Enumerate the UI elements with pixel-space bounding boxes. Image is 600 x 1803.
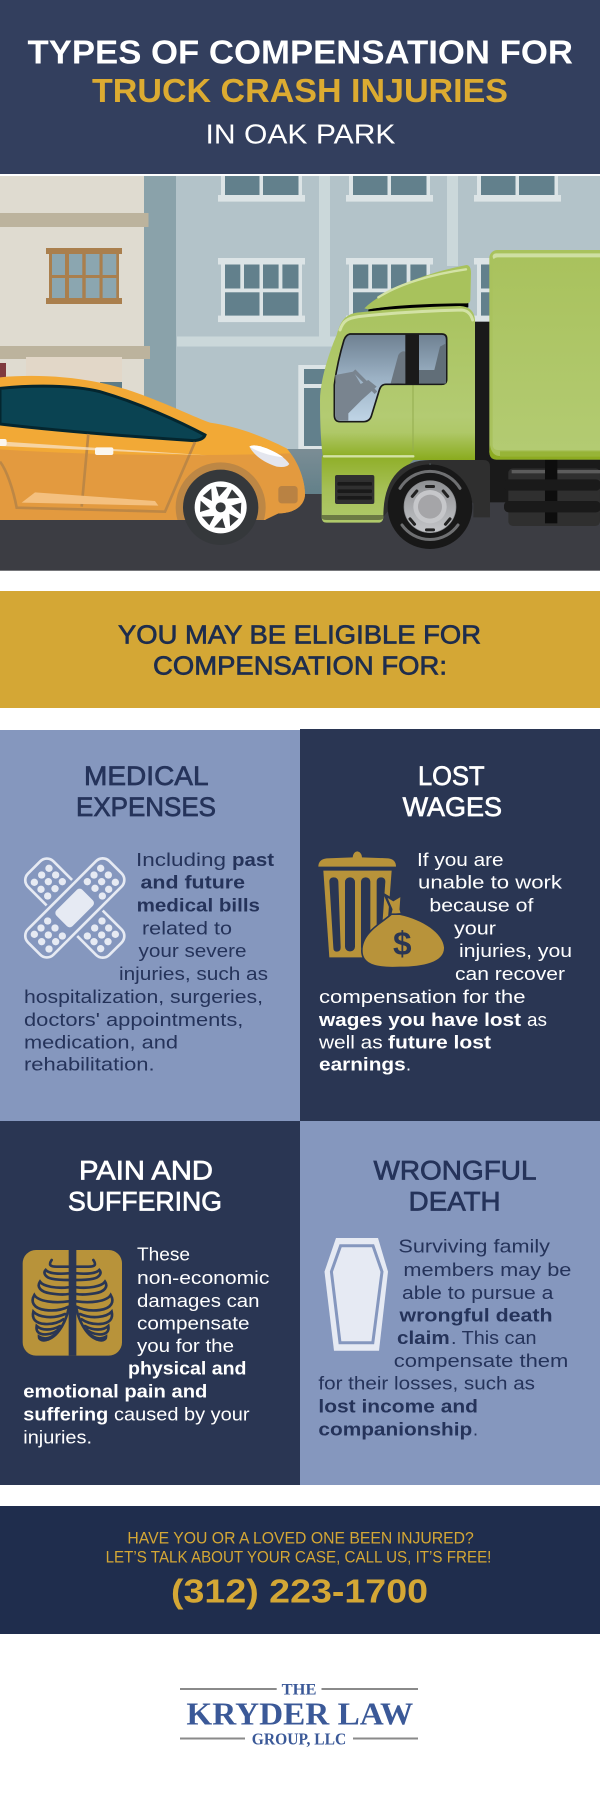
body text: pain and suffering: emotional pain and: [23, 1382, 207, 1402]
heading: medical expenses: MEDICAL: [84, 761, 209, 791]
front wheel: [388, 464, 472, 549]
phone number: (312) 223-1700: [171, 1573, 428, 1610]
body text: medical expenses: past: [232, 850, 274, 870]
body text: lost wages: .: [406, 1055, 411, 1075]
panel: medical expenses: [0, 730, 300, 1121]
heading: lost wages: WAGES: [403, 792, 502, 822]
body text: medical expenses: Including: [136, 850, 226, 870]
heading: medical expenses: [76, 761, 216, 822]
body text: lost wages: injuries, you: [459, 941, 572, 961]
heading: medical expenses: EXPENSES: [76, 792, 216, 822]
heading: wrongful death: DEATH: [409, 1186, 501, 1216]
eligibility banner: [0, 591, 600, 708]
body text: medical expenses: your severe: [138, 941, 246, 961]
body text: wrongful death: claim: [397, 1328, 450, 1348]
title line: truck crash injuries: TRUCK CRASH INJURIES: [92, 72, 508, 109]
heading: pain and suffering: [68, 1156, 222, 1216]
body text: wrongful death: able to pursue a: [402, 1283, 555, 1303]
call to action banner: [0, 1506, 600, 1634]
body text: pain and suffering: compensate: [137, 1314, 250, 1334]
body text: medical expenses: rehabilitation.: [24, 1055, 155, 1075]
body text: lost wages: earnings: [319, 1055, 406, 1075]
cargo box: [489, 250, 600, 460]
logo: the kryder law group: THE: [282, 1682, 316, 1699]
body text: lost wages: future lost: [388, 1033, 491, 1053]
body text: lost wages: wages you have lost: [318, 1010, 521, 1030]
background buildings: [0, 176, 600, 496]
logo: the kryder law group: [180, 1682, 418, 1749]
logo: the kryder law group: KRYDER LAW: [186, 1696, 413, 1732]
body text: pain and suffering: damages can: [137, 1291, 260, 1311]
body text: medical expenses: hospitalization, surgeries,: [24, 987, 263, 1007]
logo: the kryder law group: GROUP, LLC: [252, 1730, 346, 1749]
body text: lost wages: well as: [318, 1033, 383, 1053]
cta question line: HAVE YOU OR A LOVED ONE BEEN INJURED?: [127, 1529, 474, 1547]
road: [0, 494, 600, 571]
heading: wrongful death: WRONGFUL: [374, 1156, 536, 1186]
mudguard: [383, 460, 490, 517]
cab: [320, 306, 475, 523]
body text: lost wages: your: [454, 919, 496, 939]
body text: lost wages: can recover: [455, 964, 565, 984]
body text: pain and suffering: injuries.: [23, 1427, 92, 1447]
banner line 1: YOU MAY BE ELIGIBLE FOR: [118, 620, 481, 650]
icon: trash can and money bag: [318, 851, 444, 967]
body text: lost wages: If you are: [417, 850, 504, 870]
body text: medical expenses: [24, 850, 274, 1075]
illustration: street scene with car and truck: [0, 176, 600, 571]
panel: lost wages: [300, 729, 600, 1121]
banner line 2: COMPENSATION FOR:: [153, 651, 447, 681]
body text: lost wages: [318, 850, 572, 1075]
body text: pain and suffering: suffering: [23, 1405, 108, 1425]
body text: medical expenses: related to: [142, 919, 232, 939]
panel: pain and suffering: [0, 1121, 300, 1485]
subtitle: in oak park: IN OAK PARK: [206, 118, 396, 150]
body text: wrongful death: companionship: [318, 1419, 472, 1439]
heading: pain and suffering: SUFFERING: [68, 1186, 222, 1216]
body text: wrongful death: wrongful death: [398, 1306, 553, 1326]
heading: wrongful death: [374, 1156, 536, 1216]
body text: wrongful death: [318, 1237, 571, 1439]
body text: medical expenses: injuries, such as: [119, 964, 268, 984]
body text: pain and suffering: caused by your: [114, 1405, 250, 1425]
body text: pain and suffering: non-economic: [137, 1268, 269, 1288]
icon: coffin: [324, 1238, 388, 1351]
panel: wrongful death: [300, 1121, 600, 1485]
body text: lost wages: compensation for the: [319, 987, 526, 1007]
body text: medical expenses: and future: [140, 872, 245, 892]
car: [0, 376, 310, 552]
body text: wrongful death: Surviving family: [398, 1237, 550, 1257]
body text: lost wages: unable to work: [418, 872, 563, 892]
body text: wrongful death: . This can: [451, 1328, 536, 1348]
body text: pain and suffering: [23, 1245, 269, 1447]
body text: pain and suffering: you for the: [137, 1336, 234, 1356]
body text: medical expenses: medication, and: [24, 1033, 178, 1053]
body text: wrongful death: compensate them: [394, 1351, 568, 1371]
body text: medical expenses: doctors' appointments,: [24, 1010, 243, 1030]
truck: [320, 250, 600, 549]
icon: rib cage: [23, 1250, 122, 1356]
icon: trash can and money bag: $: [393, 926, 412, 963]
body text: wrongful death: .: [473, 1419, 478, 1439]
body text: lost wages: because of: [429, 896, 535, 916]
title line: types of compensation for: TYPES OF COMPENSATION FOR: [28, 34, 573, 70]
air deflector: [364, 265, 471, 311]
heading: lost wages: [403, 761, 502, 822]
icon: crossed bandages: [21, 854, 128, 962]
body text: wrongful death: members may be: [403, 1260, 571, 1280]
header banner: [0, 0, 600, 174]
body text: pain and suffering: physical and: [128, 1359, 246, 1379]
cta invitation line: LET’S TALK ABOUT YOUR CASE, CALL US, IT’S FREE!: [106, 1548, 491, 1566]
heading: lost wages: LOST: [418, 761, 484, 791]
body text: pain and suffering: These: [137, 1245, 190, 1265]
heading: pain and suffering: PAIN AND: [79, 1156, 213, 1186]
body text: medical expenses: medical bills: [137, 896, 260, 916]
car wheel: [183, 470, 258, 545]
body text: wrongful death: lost income and: [318, 1396, 478, 1416]
body text: wrongful death: for their losses, such as: [318, 1374, 535, 1394]
body text: lost wages: as: [527, 1010, 547, 1030]
